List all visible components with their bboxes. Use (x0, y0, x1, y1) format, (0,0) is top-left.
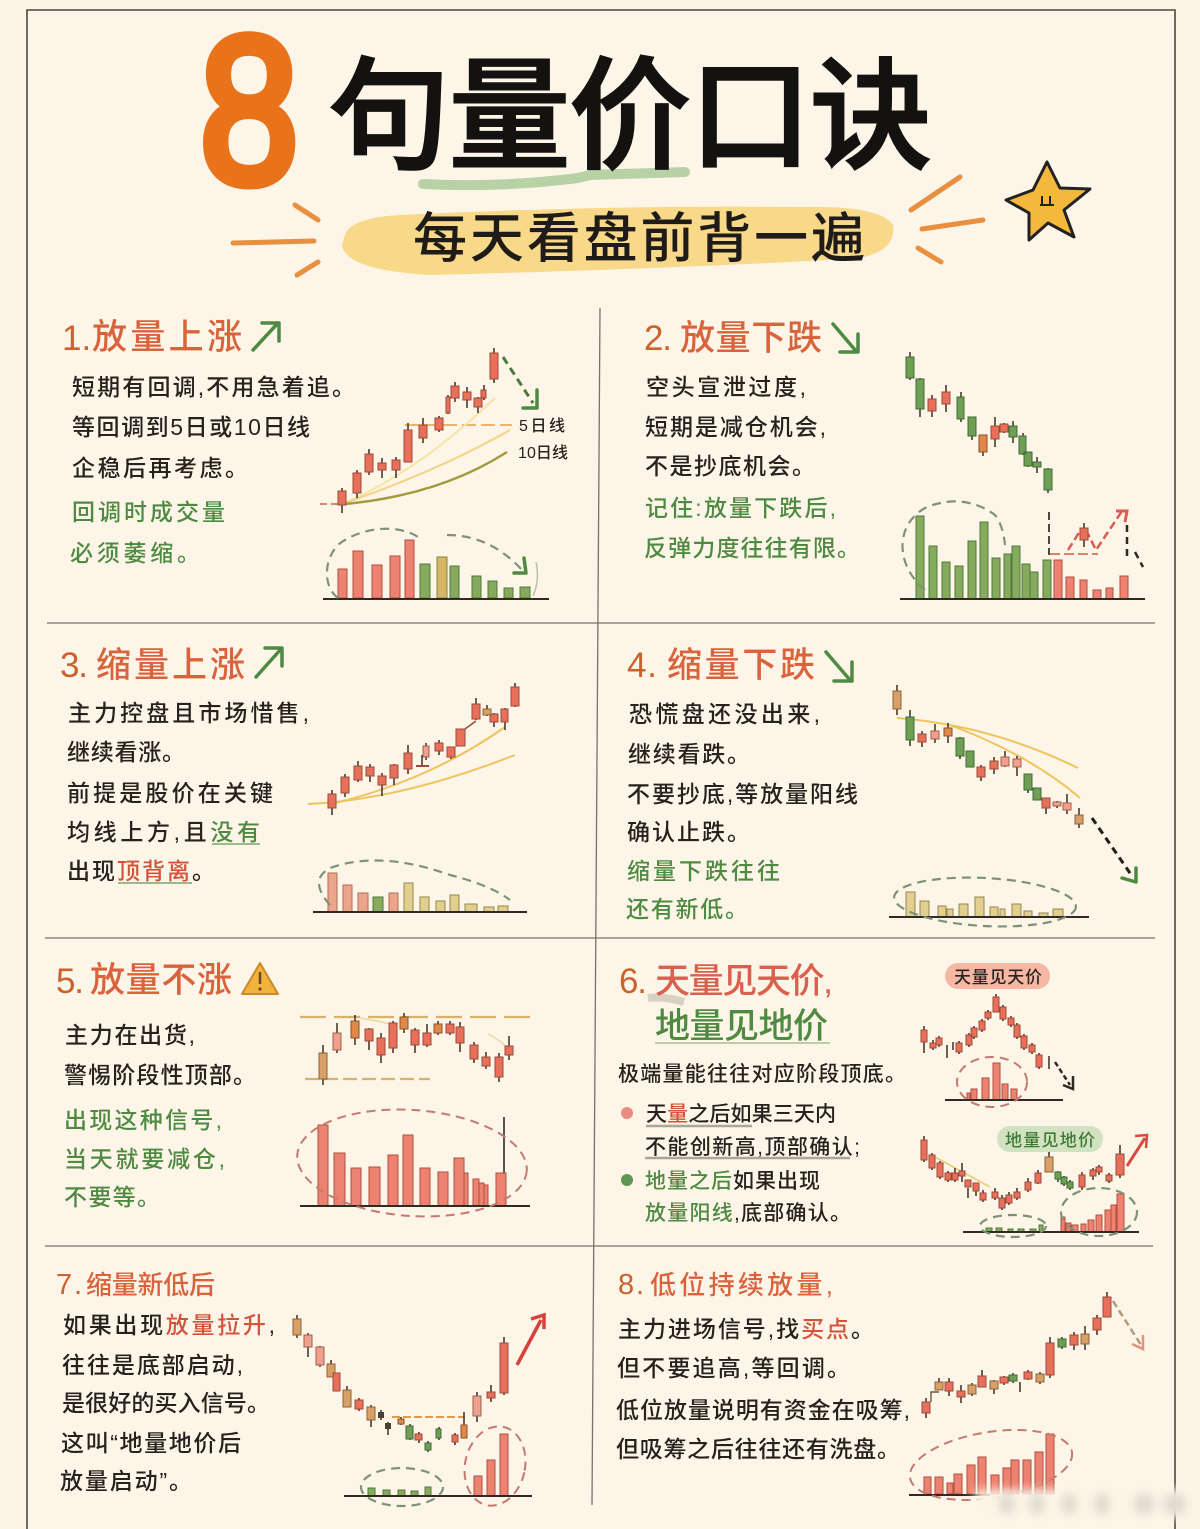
text block 6: 天量之后如果三天内 (646, 1103, 836, 1126)
pill label: 地量见地价: 地量见地价 (1005, 1131, 1095, 1150)
panel 1: 放量上涨 (62, 318, 568, 599)
text block 1: 回调时成交量 (72, 499, 225, 525)
title text: 句量价口诀 (328, 49, 932, 185)
text block 1: 等回调到5日或10日线 (72, 414, 310, 440)
text block 4 (626, 701, 858, 922)
heading 6: 地量见地价 (655, 1007, 828, 1046)
title: 8句量价口诀 (200, 0, 932, 226)
heading 7: 7. (56, 1269, 82, 1301)
text block 3: 出现顶背离。 (67, 858, 215, 884)
watermark blur strip (975, 1490, 1190, 1516)
heading 6 (619, 962, 833, 1046)
text block 4: 不要抄底,等放量阳线 (627, 781, 858, 807)
icon: green down arrow (826, 652, 852, 681)
text block 8 (616, 1316, 910, 1462)
text block 6: 不能创新高,顶部确认; (645, 1136, 860, 1159)
text block 2: 反弹力度往往有限。 (644, 535, 860, 561)
text block 5: 警惕阶段性顶部。 (64, 1062, 256, 1088)
heading 7: 缩量新低后 (86, 1270, 215, 1300)
candlestick chart 2 (906, 352, 1052, 493)
heading 3: 缩量上涨 (96, 646, 245, 685)
heading 3: 3. (60, 646, 88, 685)
candlestick chart 8 (922, 1292, 1143, 1418)
text block 4: 继续看跌。 (628, 741, 750, 767)
text block 6: 极端量能往往对应阶段顶底。 (618, 1063, 906, 1086)
volume bars 1 (323, 529, 549, 599)
candlestick chart 7 (293, 1315, 544, 1452)
volume bars 6 top (945, 1057, 1063, 1107)
volume bars 3 (313, 860, 527, 912)
text block 5: 不要等。 (64, 1184, 160, 1210)
icon: orange rays left (233, 205, 318, 275)
text block 7: 往往是底部启动, (62, 1352, 243, 1378)
heading 8: 8. (618, 1269, 644, 1301)
text block 1: 短期有回调,不用急着追。 (72, 374, 355, 400)
heading 4: 4. (627, 646, 657, 685)
text block 4: 确认止跌。 (627, 819, 750, 845)
volume bars 8 (905, 1420, 1077, 1510)
text block 3: 继续看涨。 (67, 739, 185, 765)
candlestick chart 6 bottom (921, 1135, 1147, 1210)
text block 6: 地量之后如果出现 (645, 1170, 820, 1193)
panel 4: 缩量下跌 (626, 646, 1136, 931)
MA labels: 10日线 (518, 444, 568, 462)
text block 6: 放量阳线,底部确认。 (645, 1202, 851, 1225)
icon: star (1006, 162, 1090, 240)
text block 2 (644, 374, 860, 561)
text block 5: 当天就要减仓, (64, 1146, 225, 1172)
subtitle text: 每天看盘前背一遍 (413, 209, 865, 269)
heading 2: 2. (644, 319, 672, 358)
MA labels: 5日线 (519, 417, 565, 435)
icon: green down arrow (833, 324, 858, 352)
volume bars 4 (889, 873, 1089, 931)
text block 5 (64, 1022, 256, 1210)
rebound dashed arrow (1049, 511, 1143, 567)
volume bars 6 bottom (963, 1188, 1139, 1237)
icon: orange rays right (911, 177, 983, 262)
pill label: 天量见天价: 天量见天价 (954, 968, 1042, 987)
candlestick chart 3 (308, 683, 519, 815)
panel 5: 放量不涨 (56, 961, 530, 1224)
subtitle banner (342, 207, 893, 275)
text block 7: 放量启动”。 (60, 1468, 192, 1494)
text block 8: 低位放量说明有资金在吸筹, (616, 1397, 910, 1423)
icon: green up arrow (256, 648, 282, 677)
text block 3 (67, 700, 309, 884)
candlestick chart 6 top (921, 994, 1073, 1089)
text block 1 (70, 374, 355, 566)
text block 1: 企稳后再考虑。 (72, 455, 248, 481)
panel 8: 低位持续放量 (616, 1269, 1143, 1510)
heading 4: 缩量下跌 (667, 646, 815, 685)
text block 6 (618, 1063, 906, 1225)
text block 7: 如果出现放量拉升, (63, 1312, 275, 1338)
MA labels (518, 417, 568, 462)
text block 2: 空头宣泄过度, (646, 374, 806, 400)
volume bars 2 (900, 501, 1145, 599)
text block 7: 这叫“地量地价后 (61, 1430, 241, 1456)
pill label: 地量见地价 (997, 1126, 1103, 1152)
heading 6: 6. (619, 962, 647, 1001)
volume bars 5 (294, 1102, 530, 1224)
icon: warning triangle (242, 963, 278, 994)
panel 3: 缩量上涨 (60, 646, 527, 912)
title green brush underline (423, 172, 685, 185)
text block 8: 主力进场信号,找买点。 (618, 1316, 874, 1342)
panel 2: 放量下跌 (644, 319, 1145, 599)
text block 3: 前提是股价在关键 (67, 780, 273, 806)
candlestick chart 5 (300, 1013, 530, 1085)
candlestick chart 1 (320, 348, 537, 513)
heading 5: 放量不涨 (90, 961, 232, 1000)
text block 7: 是很好的买入信号。 (62, 1390, 270, 1416)
panel 7: 缩量新低后 (56, 1269, 544, 1511)
text block 4: 恐慌盘还没出来, (629, 701, 820, 727)
text block 8: 但吸筹之后往往还有洗盘。 (616, 1436, 900, 1462)
text block 3: 均线上方,且没有 (67, 819, 260, 845)
heading 6: 天量见天价, (655, 962, 833, 1001)
heading 1: 放量上涨 (92, 318, 242, 357)
volume bars 7 (344, 1421, 533, 1511)
text block 1: 必须萎缩。 (70, 540, 200, 566)
text block 8: 但不要追高,等回调。 (617, 1355, 850, 1381)
icon: green up arrow (253, 323, 279, 350)
title numeral 8: 8 (200, 0, 298, 226)
candlestick chart 4 (893, 685, 1136, 882)
heading 5: 5. (56, 962, 84, 1001)
text block 2: 短期是减仓机会, (645, 414, 826, 440)
panel 6: 天量见天价 地量见地价 (618, 962, 1147, 1237)
text block 4: 还有新低。 (626, 896, 748, 922)
text block 5: 主力在出货, (65, 1022, 195, 1048)
section dividers (45, 308, 1155, 1505)
text block 5: 出现这种信号, (64, 1107, 222, 1133)
heading 2: 放量下跌 (680, 319, 822, 358)
text block 3: 主力控盘且市场惜售, (68, 700, 309, 726)
heading 1: 1. (62, 319, 91, 358)
yellow brush background (342, 207, 893, 275)
text block 4: 缩量下跌往往 (627, 858, 780, 884)
text block 2: 记住:放量下跌后, (645, 495, 836, 521)
text block 7 (60, 1312, 275, 1494)
text block 2: 不是抄底机会。 (645, 453, 815, 479)
pill label: 天量见天价 (945, 963, 1050, 989)
heading 8: 低位持续放量, (650, 1270, 833, 1300)
